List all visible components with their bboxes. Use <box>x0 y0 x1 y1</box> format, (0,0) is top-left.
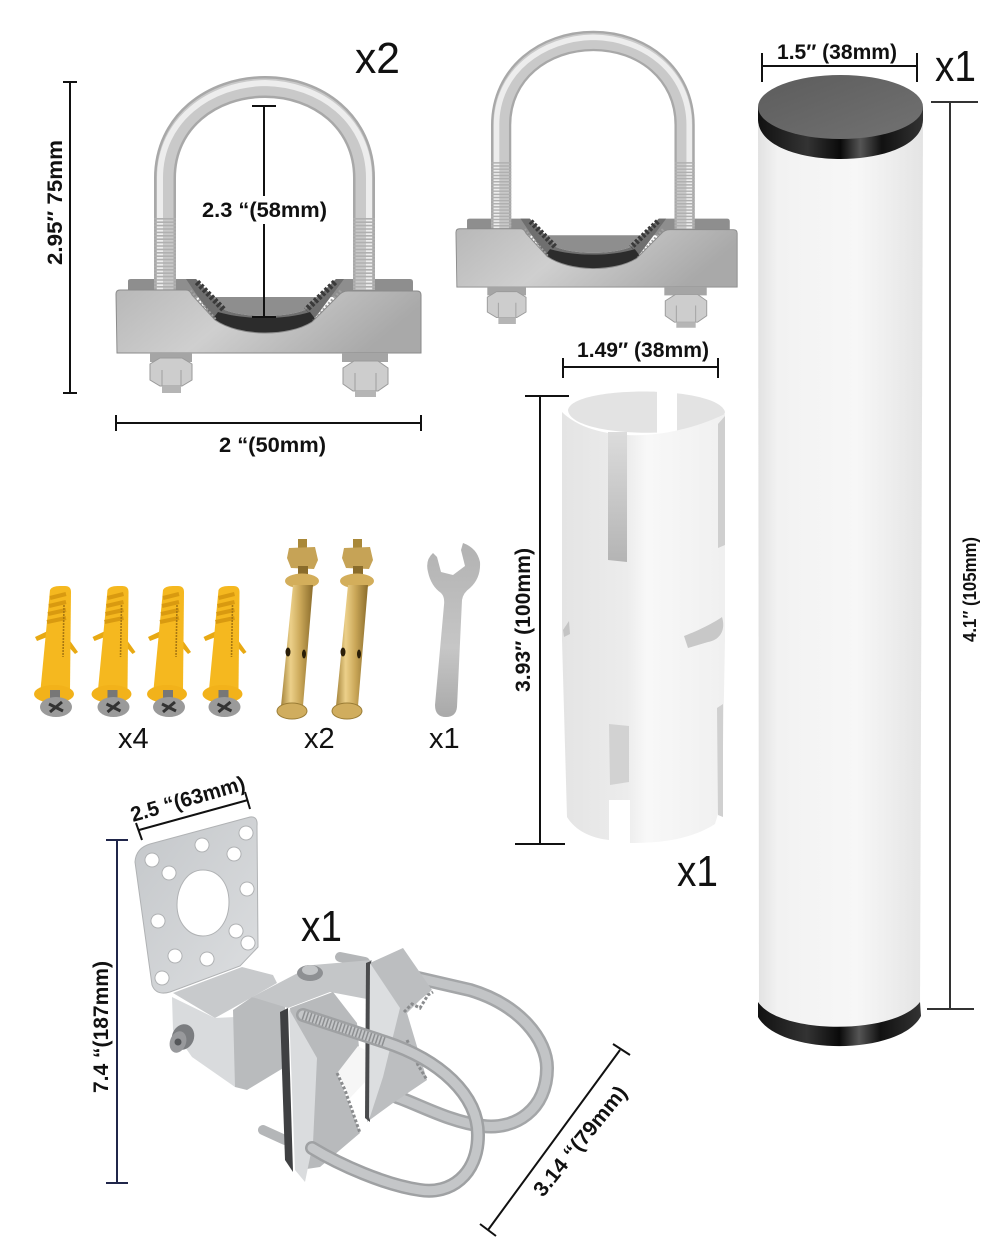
sleeve width dimension: 1.49″ (38mm) <box>577 339 709 362</box>
panel: white sleeve <box>512 339 725 896</box>
quantity x2: x2 <box>304 723 335 755</box>
height dimension 2.95 <box>44 82 77 393</box>
sleeve height dimension <box>512 396 569 844</box>
width dimension 2 inch: 2 “(50mm) <box>219 434 326 457</box>
bracket dimensions <box>90 772 632 1236</box>
panel: wrench <box>427 543 480 755</box>
L bracket lower part <box>172 960 372 1090</box>
height dimension 2.95: 2.95″ 75mm <box>44 140 67 265</box>
bracket dimensions: 3.14 “(79mm) <box>529 1082 632 1201</box>
top width dimension: 1.5″ (38mm) <box>777 41 897 64</box>
panel: expansion bolts <box>277 539 374 755</box>
bracket dimensions: 7.4 “(187mm) <box>90 961 113 1093</box>
panel: pole mounting bracket <box>90 772 632 1236</box>
rear clamp plates <box>365 948 433 1122</box>
quantity x2: x2 <box>355 34 400 83</box>
sleeve back wall <box>568 391 725 433</box>
front U-bolt <box>303 1015 478 1191</box>
top width dimension <box>762 41 917 82</box>
quantity x1: x1 <box>429 723 460 755</box>
height dimension 4.1: 4.1″ (105mm) <box>960 537 980 642</box>
quantity x1: x1 <box>677 847 718 896</box>
bracket dimensions: 2.5 “(63mm) <box>128 772 248 827</box>
quantity x1: x1 <box>301 902 342 951</box>
panel: white pole <box>758 41 980 1046</box>
mounting plate with holes <box>135 817 258 993</box>
pole bottom band <box>758 1002 921 1046</box>
quantity x4: x4 <box>118 723 149 755</box>
sleeve gap <box>657 390 677 436</box>
large U-bolt clamp <box>116 83 421 397</box>
inner height dimension 2.3: 2.3 “(58mm) <box>202 199 327 222</box>
quantity x1: x1 <box>935 42 976 91</box>
sleeve front wall <box>562 412 725 843</box>
bolt studs <box>263 957 365 1140</box>
height dimension 4.1 <box>927 102 980 1009</box>
pole top cap <box>758 75 923 159</box>
side bolts <box>167 965 323 1055</box>
small U-bolt clamp <box>456 37 737 328</box>
inner height dimension 2.3 <box>202 106 327 317</box>
panel: large clamp with dimensions <box>44 34 421 457</box>
rear U-bolt <box>383 970 547 1127</box>
front clamp plates <box>280 992 365 1182</box>
pole body <box>758 125 923 1030</box>
sleeve width dimension <box>563 339 718 378</box>
width dimension 2 inch <box>116 415 421 457</box>
sleeve height dimension: 3.93″ (100mm) <box>512 548 535 692</box>
panel: wall anchors <box>34 586 246 755</box>
